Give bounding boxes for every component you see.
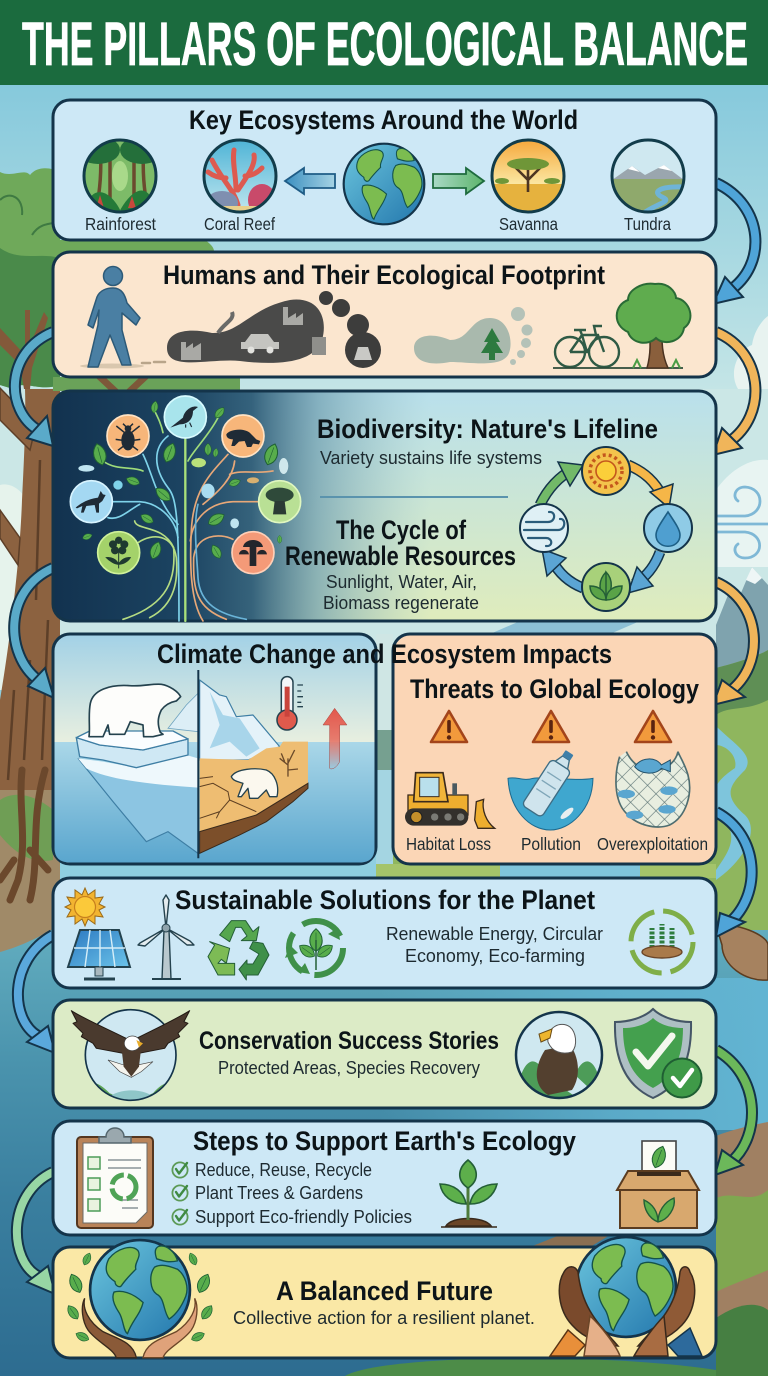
icon: walking person <box>80 266 165 368</box>
heading: Key Ecosystems Around the World <box>189 105 578 135</box>
right bushes <box>716 1190 768 1292</box>
icon: recycling plant <box>285 921 343 975</box>
icon: eco-farming cycle <box>631 911 693 973</box>
icon: dead tree <box>280 750 298 777</box>
river behind mid gap <box>376 770 393 864</box>
icon: flower <box>98 532 140 574</box>
leaves <box>82 401 282 560</box>
heading: Threats to Global Ecology <box>410 674 699 704</box>
arrow: ecosystems to footprint <box>713 183 755 304</box>
icon: mushroom <box>232 532 274 574</box>
connector arrows <box>14 183 768 1294</box>
icon: warning <box>635 711 671 742</box>
text: variety: Variety sustains life systems <box>320 447 542 468</box>
heading <box>285 515 516 571</box>
icon: green tree <box>553 284 690 368</box>
icon: polar bear on ice <box>89 684 181 737</box>
sea <box>54 742 374 862</box>
icon: eagle in scene <box>71 1010 190 1102</box>
heading: The Cycle of <box>336 515 467 545</box>
icon: wind turbine <box>138 895 194 979</box>
text: resources: Sunlight, Water, Air, <box>326 571 477 592</box>
icon: plastic pollution <box>508 746 593 830</box>
heading: Steps to Support Earth's Ecology <box>193 1126 576 1156</box>
foliage and branches in top gaps <box>53 377 240 391</box>
icon: bear <box>222 415 264 457</box>
lake behind panels <box>0 930 768 1376</box>
icon: bulldozer <box>405 773 495 828</box>
river behind biodiversity gap <box>490 621 640 634</box>
text: solutions: Renewable Energy, Circular <box>386 923 603 944</box>
arrow: left from globe <box>285 168 335 194</box>
label: Overexploitation <box>597 834 708 854</box>
text: resources: Biomass regenerate <box>323 592 479 613</box>
pale strip between panels <box>376 634 393 730</box>
icon: shield <box>615 1009 691 1098</box>
icon: sun <box>65 888 105 926</box>
right upper cloud <box>734 316 768 389</box>
list: steps: Plant Trees & Gardens <box>195 1182 363 1203</box>
arrow: steps left to future <box>17 1172 55 1294</box>
split line <box>195 670 201 858</box>
icon: clipboard <box>77 1128 153 1228</box>
heading: Sustainable Solutions for the Planet <box>175 885 595 915</box>
cracked dry land <box>200 742 308 832</box>
right rock top <box>716 925 768 980</box>
panel: a balanced future <box>53 1237 716 1358</box>
icon: wind <box>520 504 568 552</box>
heading: climate change spanning panels: Climate Change and Ecosystem Impacts <box>157 639 612 669</box>
chart: renewable cycle <box>520 447 692 611</box>
arrow: footprint left to biodiversity <box>15 332 53 446</box>
icon: bird <box>164 396 206 438</box>
winding river right <box>713 726 751 880</box>
icon: sprout <box>440 1160 497 1227</box>
icon: eagle portrait <box>516 1012 602 1100</box>
arrow: threats to solutions <box>716 812 752 937</box>
small rock under steps panel <box>530 1235 610 1247</box>
left ground with roots <box>0 775 60 952</box>
label: Coral Reef <box>204 214 275 234</box>
text: collective action: Collective action for a resilient planet. <box>233 1307 535 1328</box>
arrow: conservation to steps <box>715 1050 752 1175</box>
icon: rainforest <box>82 138 158 214</box>
panel: climate change <box>53 634 376 864</box>
icon: globe held by diverse hands <box>550 1237 702 1356</box>
icon: thermometer <box>277 677 303 730</box>
label: Tundra <box>624 214 671 234</box>
arrow: biodiversity left to climate <box>14 568 54 698</box>
heading: Conservation Success Stories <box>199 1027 499 1055</box>
icon: plant <box>582 563 630 611</box>
icon: light green footprint <box>414 307 532 365</box>
icon: central globe <box>344 144 424 224</box>
icon: sun <box>582 447 630 495</box>
bottom bank <box>345 1358 716 1376</box>
label: Savanna <box>499 214 558 234</box>
icon: coral reef <box>204 140 276 216</box>
text: protected areas: Protected Areas, Species Recovery <box>218 1057 481 1078</box>
icon: tundra <box>612 140 684 216</box>
panel: threats to global ecology <box>393 634 716 864</box>
heading: A Balanced Future <box>276 1276 493 1306</box>
icon: solar panel <box>68 930 130 979</box>
icon: ballot box <box>617 1141 699 1228</box>
glacier peak <box>200 680 280 760</box>
panel: steps to support <box>53 1121 716 1235</box>
panel: key ecosystems <box>53 100 716 240</box>
icon: warning <box>533 711 569 742</box>
icon: globe held in hands <box>65 1240 215 1358</box>
title banner <box>0 0 768 85</box>
small wildlife silhouettes <box>78 458 288 528</box>
arrow: rising temperature <box>323 708 347 769</box>
label: Habitat Loss <box>406 834 491 854</box>
panel: sustainable solutions <box>53 878 716 988</box>
icon: recycle <box>208 921 269 980</box>
green riverbank right <box>376 650 768 930</box>
arrow: right from globe <box>433 168 484 194</box>
panel: biodiversity and renewable resources <box>53 391 716 621</box>
text: resources <box>323 571 479 613</box>
icon: beetle <box>107 415 149 457</box>
icon: bicycle <box>555 326 619 367</box>
distant mountains <box>716 567 768 690</box>
icon: wolf <box>70 481 112 523</box>
left tree trunk <box>0 389 60 790</box>
icon: warning <box>431 711 467 742</box>
threat illustrations <box>405 746 693 832</box>
icon: small polar bear <box>231 769 278 798</box>
label: Rainforest <box>85 214 156 234</box>
icon: fishing net <box>615 751 690 828</box>
arrow: solutions left to conservation <box>18 935 55 1053</box>
icon: savanna <box>492 140 564 214</box>
icon: tree of life <box>70 396 301 621</box>
icon: water <box>644 504 692 552</box>
right lower cloud <box>716 460 768 567</box>
hills behind mid gap <box>376 730 393 770</box>
heading: Renewable Resources <box>285 541 516 571</box>
heading: Humans and Their Ecological Footprint <box>163 260 605 290</box>
climate illustration <box>76 670 347 858</box>
icon: small check badge <box>662 1058 702 1098</box>
list: steps <box>172 1159 412 1227</box>
right rock lower <box>716 1122 768 1376</box>
label: Pollution <box>521 834 581 854</box>
iceberg and floe <box>76 693 198 853</box>
text: solutions <box>386 923 603 966</box>
panel: conservation success <box>53 1000 716 1108</box>
list: steps: Support Eco-friendly Policies <box>195 1206 412 1227</box>
heading: Biodiversity: Nature's Lifeline <box>317 414 658 444</box>
icon: heavy dark footprint <box>167 291 381 368</box>
list: steps: Reduce, Reuse, Recycle <box>195 1159 372 1180</box>
arrow ring <box>540 465 663 588</box>
panel: ecological footprint <box>53 252 716 377</box>
left cloud <box>0 484 26 690</box>
text: solutions: Economy, Eco-farming <box>405 945 585 966</box>
arrow: biodiversity to threats <box>713 582 754 705</box>
icon: wind swirls <box>718 487 768 558</box>
left tree foliage <box>0 168 214 388</box>
icon: tree in circle <box>259 481 301 523</box>
arrow: footprint to biodiversity <box>713 332 755 455</box>
